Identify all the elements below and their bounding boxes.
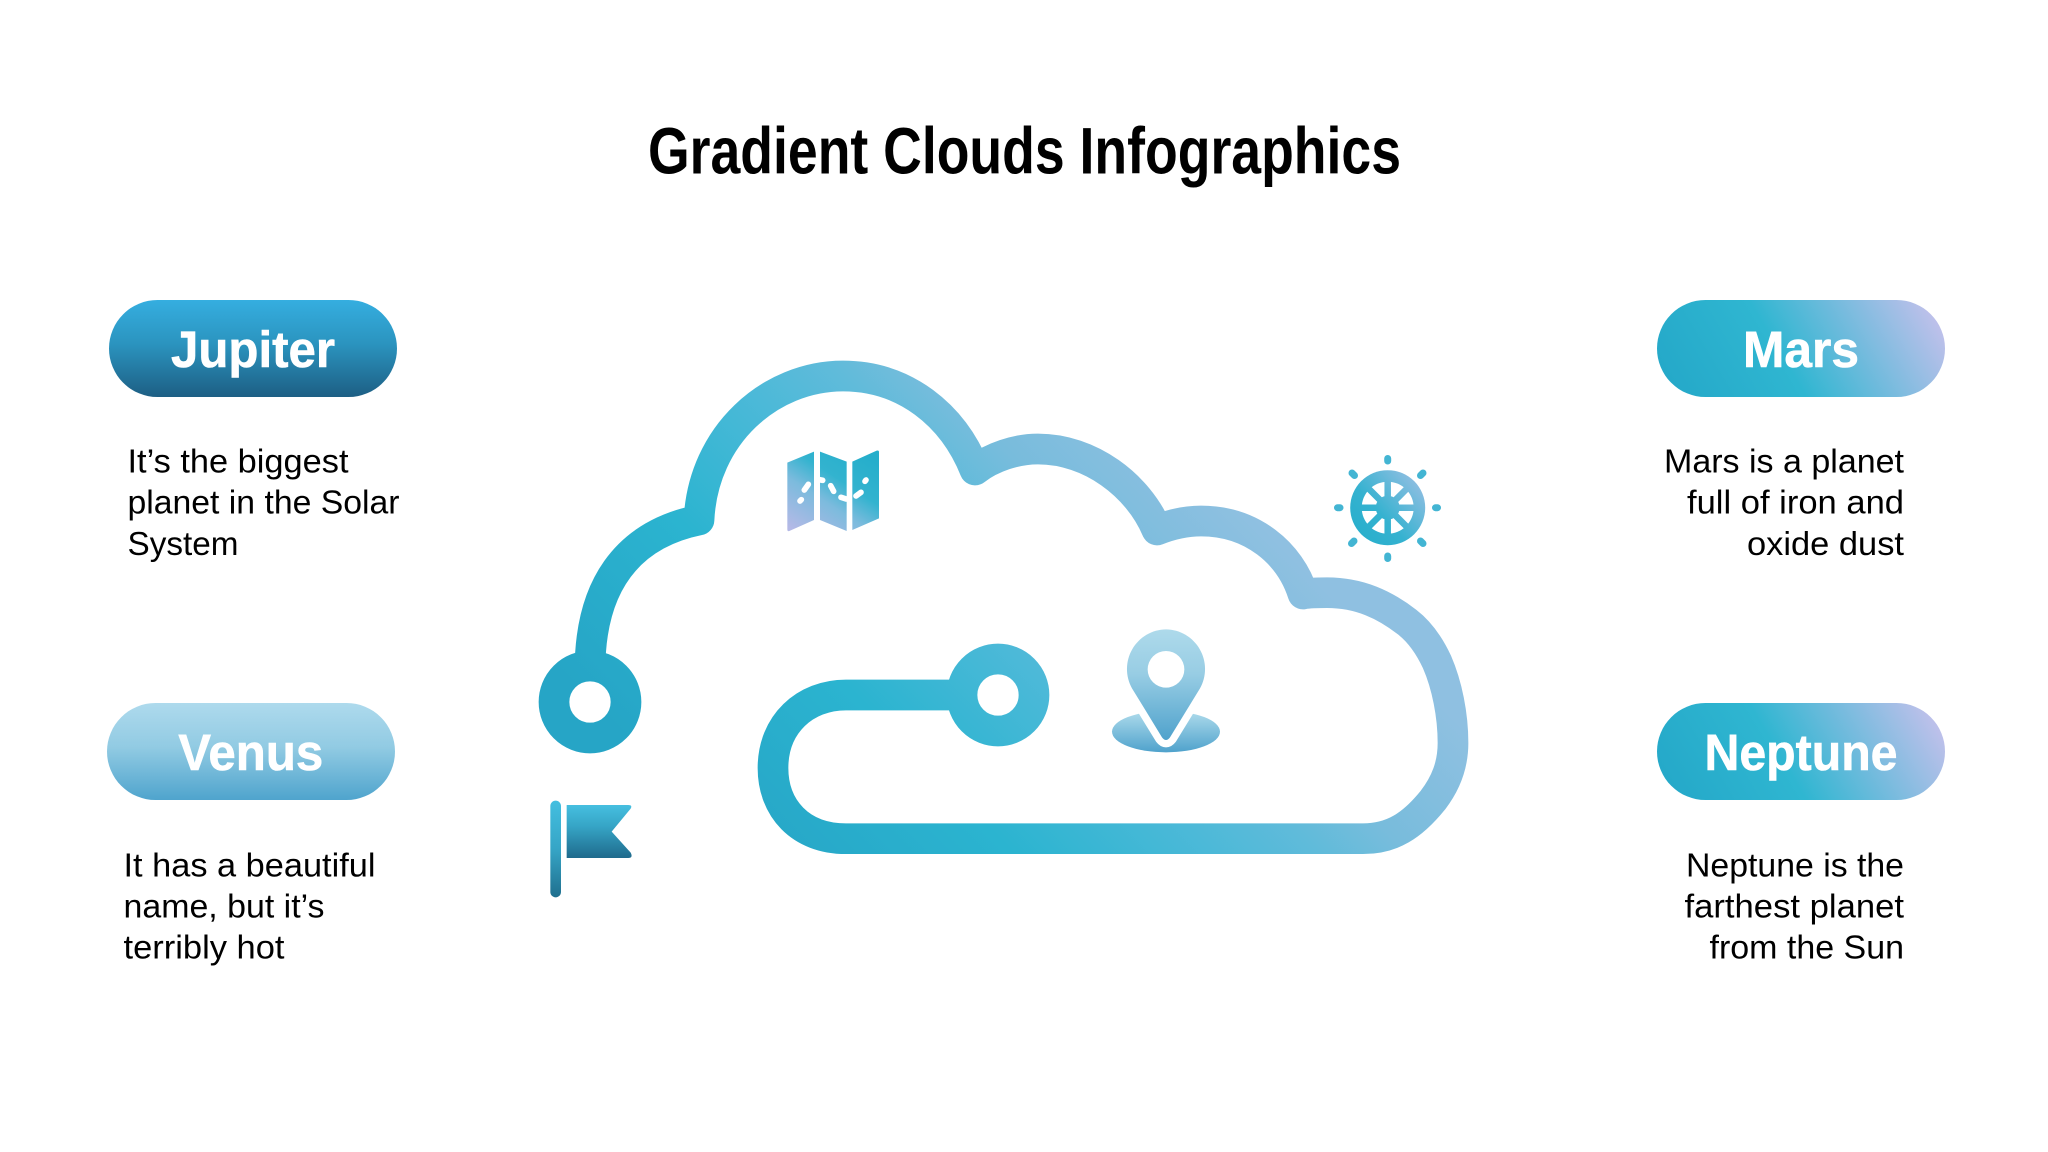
- pill: Neptune: [1657, 703, 1945, 800]
- text: Mars description: Mars is a planet: [1664, 444, 1905, 481]
- text: Jupiter description: System: [128, 526, 238, 563]
- text: Neptune description: from the Sun: [1710, 930, 1904, 966]
- text: Jupiter description: [128, 444, 400, 563]
- pill: Venus: Venus: [178, 724, 323, 781]
- pill: Mars: Mars: [1743, 321, 1859, 378]
- text: Jupiter description: planet in the Solar: [128, 484, 400, 522]
- pill: Neptune: Neptune: [1704, 724, 1898, 781]
- title: Gradient Clouds Infographics: [648, 114, 1401, 188]
- pill: Venus: [107, 703, 395, 800]
- cloud outline with path endpoints: [554, 376, 1453, 839]
- text: Venus description: name, but it’s: [124, 889, 324, 926]
- icon: map: [787, 450, 879, 531]
- icon: ship wheel: [1338, 458, 1438, 558]
- text: Venus description: terribly hot: [124, 930, 285, 966]
- panel: Venus: [107, 703, 395, 966]
- pill: Jupiter: [109, 300, 397, 397]
- icon: location pin: [1112, 629, 1220, 752]
- text: Neptune description: [1684, 848, 1905, 966]
- panel: Jupiter: [109, 300, 400, 563]
- panel: Neptune: [1657, 703, 1945, 966]
- text: Jupiter description: It’s the biggest: [128, 444, 349, 481]
- pill: Jupiter: Jupiter: [171, 321, 335, 378]
- cloud path: [590, 376, 1453, 839]
- text: Mars description: oxide dust: [1747, 526, 1905, 563]
- text: Neptune description: farthest planet: [1684, 889, 1905, 926]
- panel: Mars: [1657, 300, 1945, 563]
- text: Venus description: [124, 848, 376, 966]
- text: Mars description: [1664, 444, 1905, 563]
- inner endpoint ring: [962, 659, 1034, 731]
- pill: Mars: [1657, 300, 1945, 397]
- text: Neptune description: Neptune is the: [1686, 848, 1904, 885]
- left endpoint ring: [554, 666, 626, 738]
- icon: flag: [550, 801, 632, 897]
- text: Mars description: full of iron and: [1687, 484, 1904, 522]
- text: Venus description: It has a beautiful: [124, 848, 376, 885]
